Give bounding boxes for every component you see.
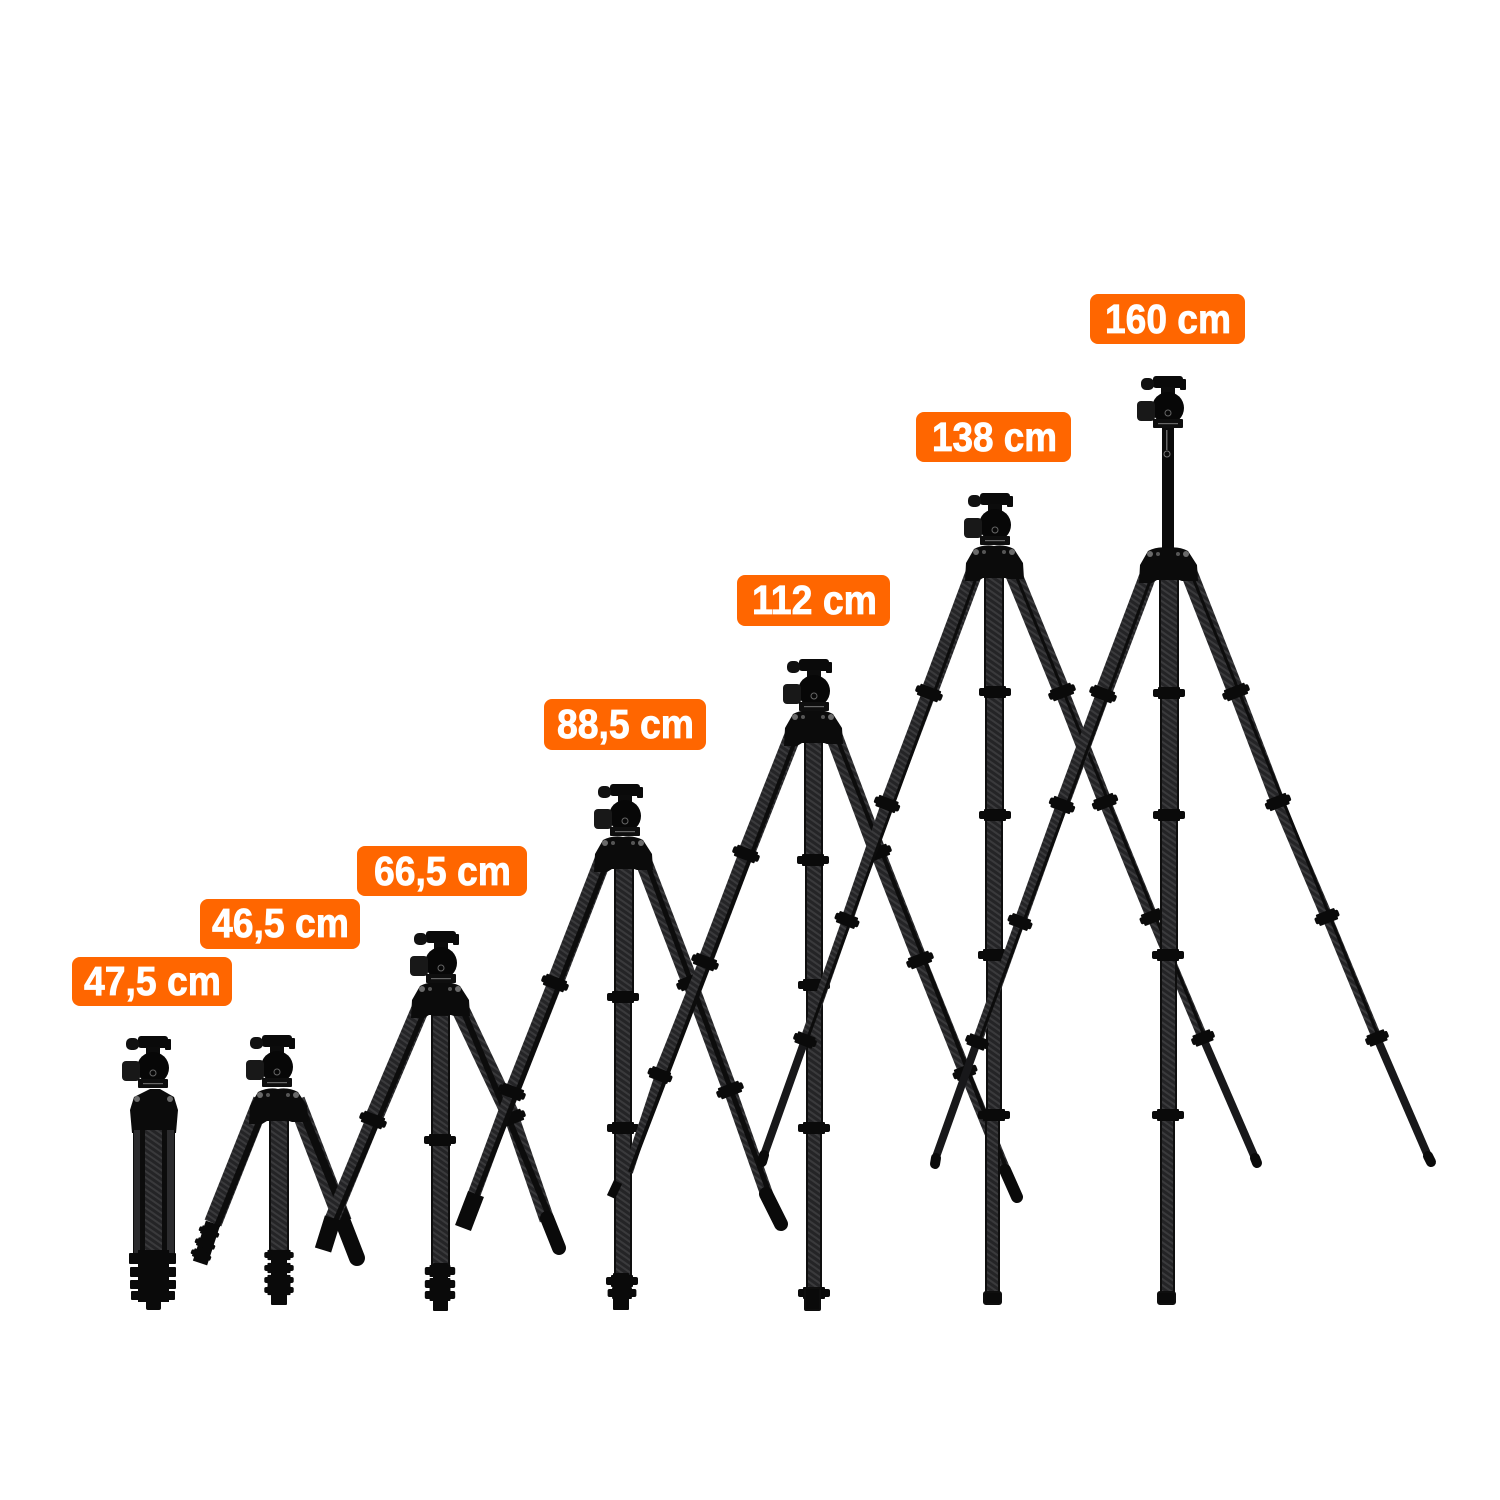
left leg: [762, 570, 978, 1162]
centre column: [264, 1120, 294, 1305]
tripod 5: 112 cm: [611, 575, 1017, 1310]
height label 66,5 cm: 66,5 cm: [374, 848, 511, 894]
centre column: [797, 740, 830, 1310]
hub: [965, 545, 1024, 581]
hub: [1139, 547, 1198, 583]
right leg: [1188, 570, 1431, 1162]
height label 47,5 cm: 47,5 cm: [84, 958, 221, 1004]
ball head: [594, 784, 643, 836]
tripod 1: folded 47,5 cm: [72, 957, 232, 1310]
tripod 2: 46,5 cm: [190, 899, 360, 1305]
ball head: [964, 493, 1013, 545]
tripod 4: 88,5 cm: [463, 699, 781, 1310]
height label 138 cm: 138 cm: [932, 414, 1057, 460]
collapsed clamps: [129, 1250, 176, 1310]
centre column: [978, 575, 1011, 1304]
right leg: [1012, 570, 1257, 1163]
left leg: [323, 1000, 428, 1250]
height label 88,5 cm: 88,5 cm: [557, 701, 694, 747]
right leg: [296, 1100, 357, 1258]
centre column: [1152, 575, 1185, 1304]
centre column: [606, 865, 639, 1310]
height label 112 cm: 112 cm: [752, 577, 877, 623]
ball head: [246, 1035, 295, 1087]
right leg: [830, 725, 1017, 1197]
centre column: [424, 1015, 456, 1311]
left leg: [463, 852, 610, 1228]
extended centre rod: [1162, 427, 1174, 549]
hub: [130, 1089, 178, 1133]
tripod 3: 66,5 cm: [323, 846, 559, 1311]
left leg: [935, 570, 1153, 1164]
ball head: [122, 1036, 171, 1088]
height label 160 cm: 160 cm: [1105, 296, 1231, 342]
hub: [784, 710, 843, 746]
hub: [249, 1088, 308, 1124]
left leg: [611, 725, 800, 1197]
ball head: [1137, 376, 1186, 428]
folded legs and column: [133, 1130, 175, 1255]
hub: [594, 836, 653, 872]
tripod 7: 160 cm: [935, 294, 1431, 1304]
ball head: [410, 931, 459, 983]
hub: [411, 982, 470, 1018]
tripod 6: 138 cm: [762, 412, 1257, 1304]
height label 46,5 cm: 46,5 cm: [212, 900, 349, 946]
ball head: [783, 659, 832, 711]
right leg: [640, 852, 781, 1224]
left leg: [190, 1100, 266, 1263]
right leg: [456, 1000, 559, 1248]
